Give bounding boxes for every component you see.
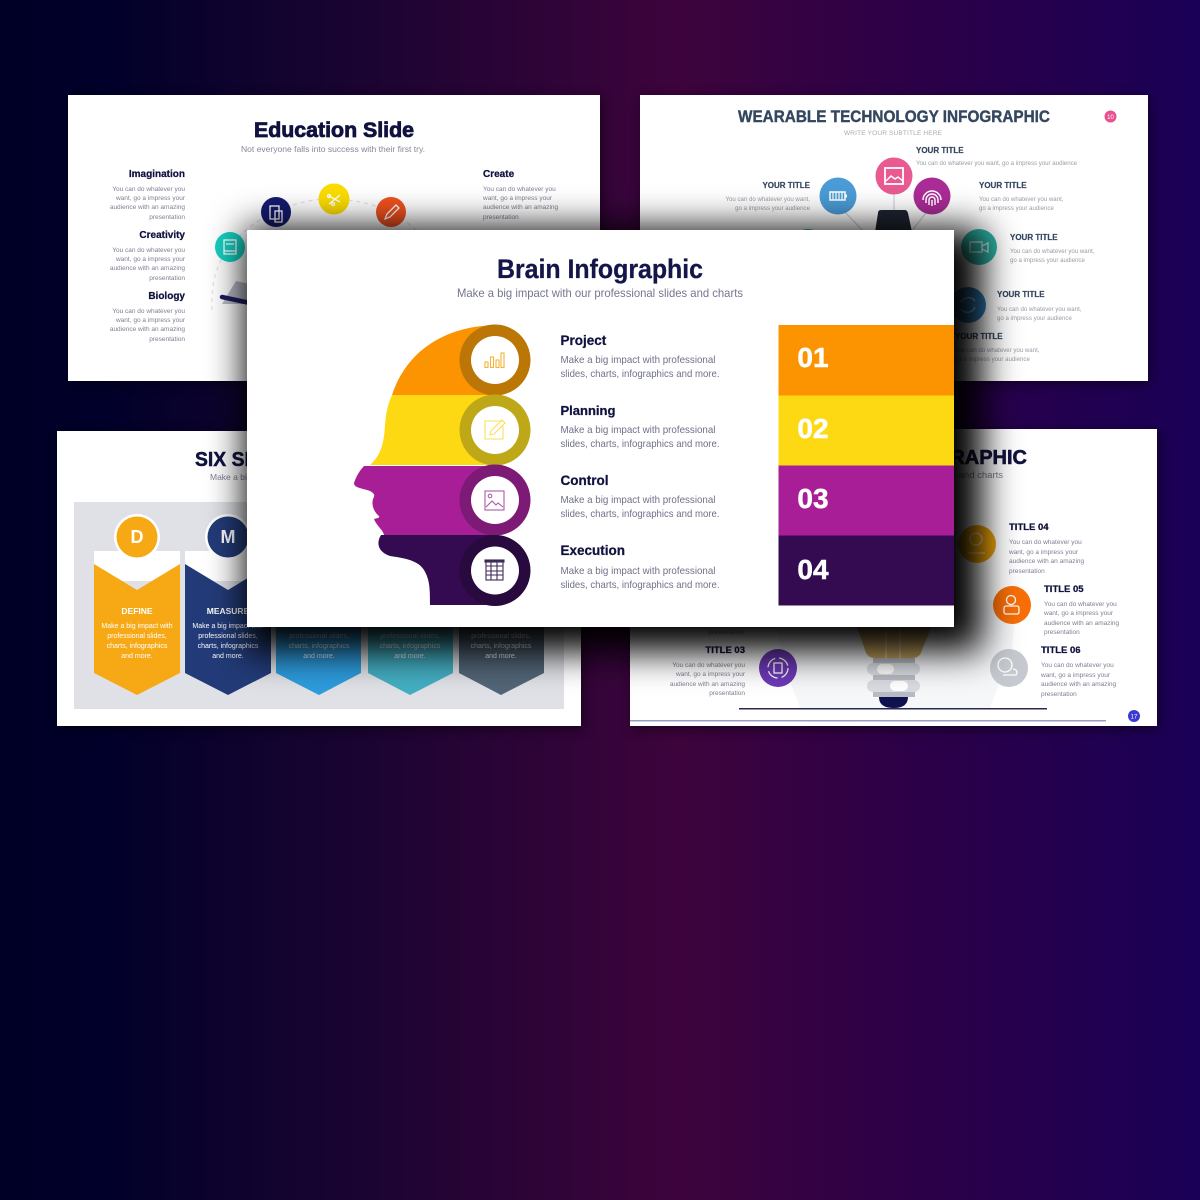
column: define: charts, infographics	[107, 643, 168, 650]
page number badge: 17	[1131, 714, 1138, 720]
item: execution: slides, charts, infographics and more.	[560, 579, 720, 591]
item: creativity: presentation	[149, 275, 185, 282]
hidden teal circle	[790, 229, 826, 265]
item: biology: You can do whatever you	[112, 308, 185, 315]
item: control: Control	[560, 473, 608, 488]
item: title 04: want, go a impress your	[1008, 549, 1079, 556]
page number badge	[1128, 710, 1140, 722]
column: define: professional slides,	[107, 633, 167, 640]
item: title 04: You can do whatever you	[1009, 539, 1082, 546]
item: upper right: You can do whatever you want,	[979, 196, 1064, 203]
panel: education slide	[68, 95, 602, 384]
item: bottom right: You can do whatever you want,	[955, 347, 1040, 354]
icon: book	[215, 232, 245, 262]
item: control: Make a big impact with professional	[560, 494, 716, 506]
page number badge	[1104, 110, 1116, 122]
icon: grey globe cloud	[990, 649, 1028, 687]
column: define: DEFINE	[121, 606, 153, 616]
page number badge: 10	[1107, 115, 1114, 121]
item: title 06: presentation	[1041, 691, 1077, 698]
head band: purple	[354, 466, 497, 535]
number bar: 03: 03	[797, 483, 829, 514]
item: title 04	[1008, 522, 1085, 575]
smartwatch body	[875, 210, 912, 232]
item: create: audience with an amazing	[483, 204, 559, 211]
education title: Education Slide	[254, 119, 414, 142]
item: top	[916, 146, 1078, 167]
item: upper right: go a impress your audience	[979, 205, 1054, 212]
wearable subtitle: WRITE YOUR SUBTITLE HERE	[844, 130, 943, 137]
column: improve: professional slides,	[380, 633, 440, 640]
footer line	[630, 720, 1106, 722]
column: define: Make a big impact with	[101, 623, 173, 630]
item: middle right	[1010, 233, 1095, 264]
item: bottom right: YOUR TITLE	[955, 332, 1003, 341]
number bar: 01: 01	[797, 342, 829, 373]
item: lower right	[997, 290, 1082, 322]
item: top: You can do whatever you want, go a impress your audience	[916, 160, 1078, 167]
item: biology: Biology	[148, 291, 185, 302]
column: define	[94, 514, 180, 695]
head band: yellow	[370, 395, 497, 465]
item: create: Create	[483, 169, 515, 180]
item: title 04: presentation	[1009, 568, 1045, 575]
item: top: YOUR TITLE	[916, 146, 964, 155]
item: biology: want, go a impress your	[115, 317, 186, 324]
item: project: slides, charts, infographics and more.	[560, 368, 720, 380]
number bar: 03	[778, 466, 954, 536]
item: execution: Make a big impact with professional	[560, 565, 716, 577]
item: upper left: You can do whatever you want,	[726, 196, 810, 203]
item: title 05: presentation	[1044, 629, 1080, 636]
column: analyze	[276, 564, 361, 695]
icon: scissors	[318, 184, 350, 214]
item: planning: slides, charts, infographics and more.	[560, 438, 720, 450]
item: execution	[560, 543, 720, 591]
item: bottom right	[955, 332, 1040, 363]
item: upper left	[726, 181, 811, 212]
panel: wearable technology slide	[640, 95, 1150, 384]
brain subtitle: Make a big impact with our professional slides and charts	[457, 286, 743, 300]
item: title 06	[1040, 645, 1117, 698]
column: control: and more.	[485, 653, 517, 660]
pedestal graphic	[222, 281, 250, 304]
item: control: slides, charts, infographics and more.	[560, 508, 720, 520]
light bulb subtitle: slides and charts	[932, 470, 1003, 481]
item: title 05: You can do whatever you	[1044, 601, 1117, 608]
item: lower right: YOUR TITLE	[997, 290, 1045, 299]
item: upper right: YOUR TITLE	[979, 181, 1027, 190]
head band: dark	[378, 535, 530, 605]
icon: image	[876, 158, 912, 194]
floor line	[739, 708, 1047, 710]
item: title 03: audience with an amazing	[670, 681, 745, 688]
light bulb title: INFOGRAPHIC	[887, 447, 1027, 469]
item: planning: Planning	[560, 403, 615, 418]
icon: orange support	[993, 586, 1031, 624]
item: upper right	[979, 181, 1064, 212]
column: control: professional slides,	[471, 633, 531, 640]
head band: orange	[392, 325, 497, 395]
icon: building grid	[485, 560, 504, 580]
column: measure: MEASURE	[207, 606, 250, 616]
panel: brain infographic slide	[247, 230, 954, 627]
item: imagination: You can do whatever you	[112, 186, 185, 193]
item: control	[560, 473, 720, 520]
icon: video	[961, 229, 997, 265]
column: improve	[368, 564, 453, 695]
column: define: and more.	[121, 653, 153, 660]
item: bottom right: go a impress your audience	[955, 356, 1030, 363]
item: project: Make a big impact with professional	[560, 354, 716, 366]
ring: control	[460, 464, 530, 536]
item: planning	[560, 403, 720, 450]
panel: light bulb slide	[630, 429, 1159, 729]
icon: pencil	[376, 197, 406, 227]
item: lower right: You can do whatever you want,	[997, 306, 1082, 313]
column: control	[459, 564, 544, 695]
dashed arc	[212, 199, 425, 310]
item: title 03: You can do whatever you	[672, 662, 745, 669]
item: planning: Make a big impact with professional	[560, 424, 716, 436]
column: improve: and more.	[394, 653, 426, 660]
bulb glow background	[772, 600, 1016, 708]
column: define: D	[130, 527, 144, 547]
partial text: title 02: presentation	[708, 629, 744, 636]
item: imagination: Imagination	[129, 169, 185, 180]
item: execution: Execution	[560, 543, 625, 558]
column: measure: professional slides,	[198, 633, 258, 640]
shadow of main slide	[245, 228, 983, 652]
icon: sync	[950, 287, 986, 323]
number bar: 02: 02	[797, 413, 829, 444]
icon: bar chart	[485, 353, 504, 368]
item: middle right: You can do whatever you want,	[1010, 248, 1095, 255]
item: title 05: TITLE 05	[1044, 584, 1084, 595]
icon: note and pencil	[485, 420, 505, 439]
item: imagination: audience with an amazing	[110, 204, 185, 211]
number bar: 01	[778, 325, 954, 396]
item: imagination: presentation	[149, 214, 185, 221]
brain title: Brain Infographic	[497, 254, 703, 284]
item: creativity	[110, 230, 186, 282]
item: create: want, go a impress your	[482, 195, 553, 202]
column: improve: charts, infographics	[380, 643, 441, 650]
column: measure: charts, infographics	[198, 643, 259, 650]
ring: project	[460, 324, 530, 396]
number bar: 04	[778, 536, 954, 606]
item: title 06: audience with an amazing	[1041, 681, 1117, 688]
icon: picture	[485, 491, 504, 510]
item: title 05: want, go a impress your	[1043, 610, 1114, 617]
item: biology: audience with an amazing	[110, 326, 185, 333]
item: create	[482, 169, 559, 221]
item: biology	[110, 291, 186, 343]
item: title 06: want, go a impress your	[1040, 672, 1111, 679]
number bar: 04: 04	[797, 554, 829, 585]
item: project: Project	[560, 333, 607, 348]
connector lines	[838, 190, 932, 240]
panel: six sigma slide	[57, 431, 583, 729]
column: analyze: professional slides,	[289, 633, 349, 640]
head illustration	[354, 324, 530, 606]
item: title 03: presentation	[709, 690, 745, 697]
grey backing panel	[74, 502, 564, 709]
item: lower right: go a impress your audience	[997, 315, 1072, 322]
item: imagination	[110, 169, 186, 221]
item: middle right: go a impress your audience	[1010, 257, 1085, 264]
six sigma title: SIX SIGMA	[195, 449, 295, 471]
item: creativity: Creativity	[139, 230, 185, 241]
column: control: charts, infographics	[471, 643, 532, 650]
item: title 03: want, go a impress your	[675, 671, 746, 678]
item: biology: presentation	[149, 336, 185, 343]
six sigma subtitle: Make a big impact	[210, 472, 280, 482]
icon: purple cycle	[759, 649, 797, 687]
item: creativity: want, go a impress your	[115, 256, 186, 263]
item: title 06: You can do whatever you	[1041, 662, 1114, 669]
education subtitle: Not everyone falls into success with their first try.	[241, 144, 425, 154]
item: title 04: TITLE 04	[1009, 522, 1049, 533]
item: title 03: TITLE 03	[705, 645, 745, 656]
item: create: presentation	[483, 214, 519, 221]
item: upper left: YOUR TITLE	[762, 181, 811, 190]
column: measure: M	[220, 527, 236, 547]
column: measure: and more.	[212, 653, 244, 660]
item: create: You can do whatever you	[483, 186, 556, 193]
icon: clipboard	[261, 197, 291, 227]
item: project	[560, 333, 720, 380]
item: middle right: YOUR TITLE	[1010, 233, 1058, 242]
item: creativity: You can do whatever you	[112, 247, 185, 254]
item: title 04: audience with an amazing	[1009, 558, 1085, 565]
item: title 06: TITLE 06	[1041, 645, 1081, 656]
column: analyze: and more.	[303, 653, 335, 660]
column: analyze: charts, infographics	[289, 643, 350, 650]
item: title 03	[670, 645, 746, 697]
icon: amber globe	[958, 525, 996, 563]
column: measure: Make a big impact with	[192, 623, 264, 630]
item: imagination: want, go a impress your	[115, 195, 186, 202]
ring: planning	[460, 394, 530, 466]
wearable title: WEARABLE TECHNOLOGY INFOGRAPHIC	[738, 107, 1050, 126]
light bulb base	[850, 600, 938, 708]
item: title 05: audience with an amazing	[1044, 620, 1120, 627]
column: measure	[185, 514, 271, 695]
item: upper left: go a impress your audience	[735, 205, 811, 212]
item: title 05	[1043, 584, 1120, 636]
icon: battery	[820, 178, 856, 214]
number bar: 02	[778, 396, 954, 466]
ring: execution	[460, 535, 530, 606]
icon: fingerprint	[914, 178, 950, 214]
item: creativity: audience with an amazing	[110, 265, 185, 272]
